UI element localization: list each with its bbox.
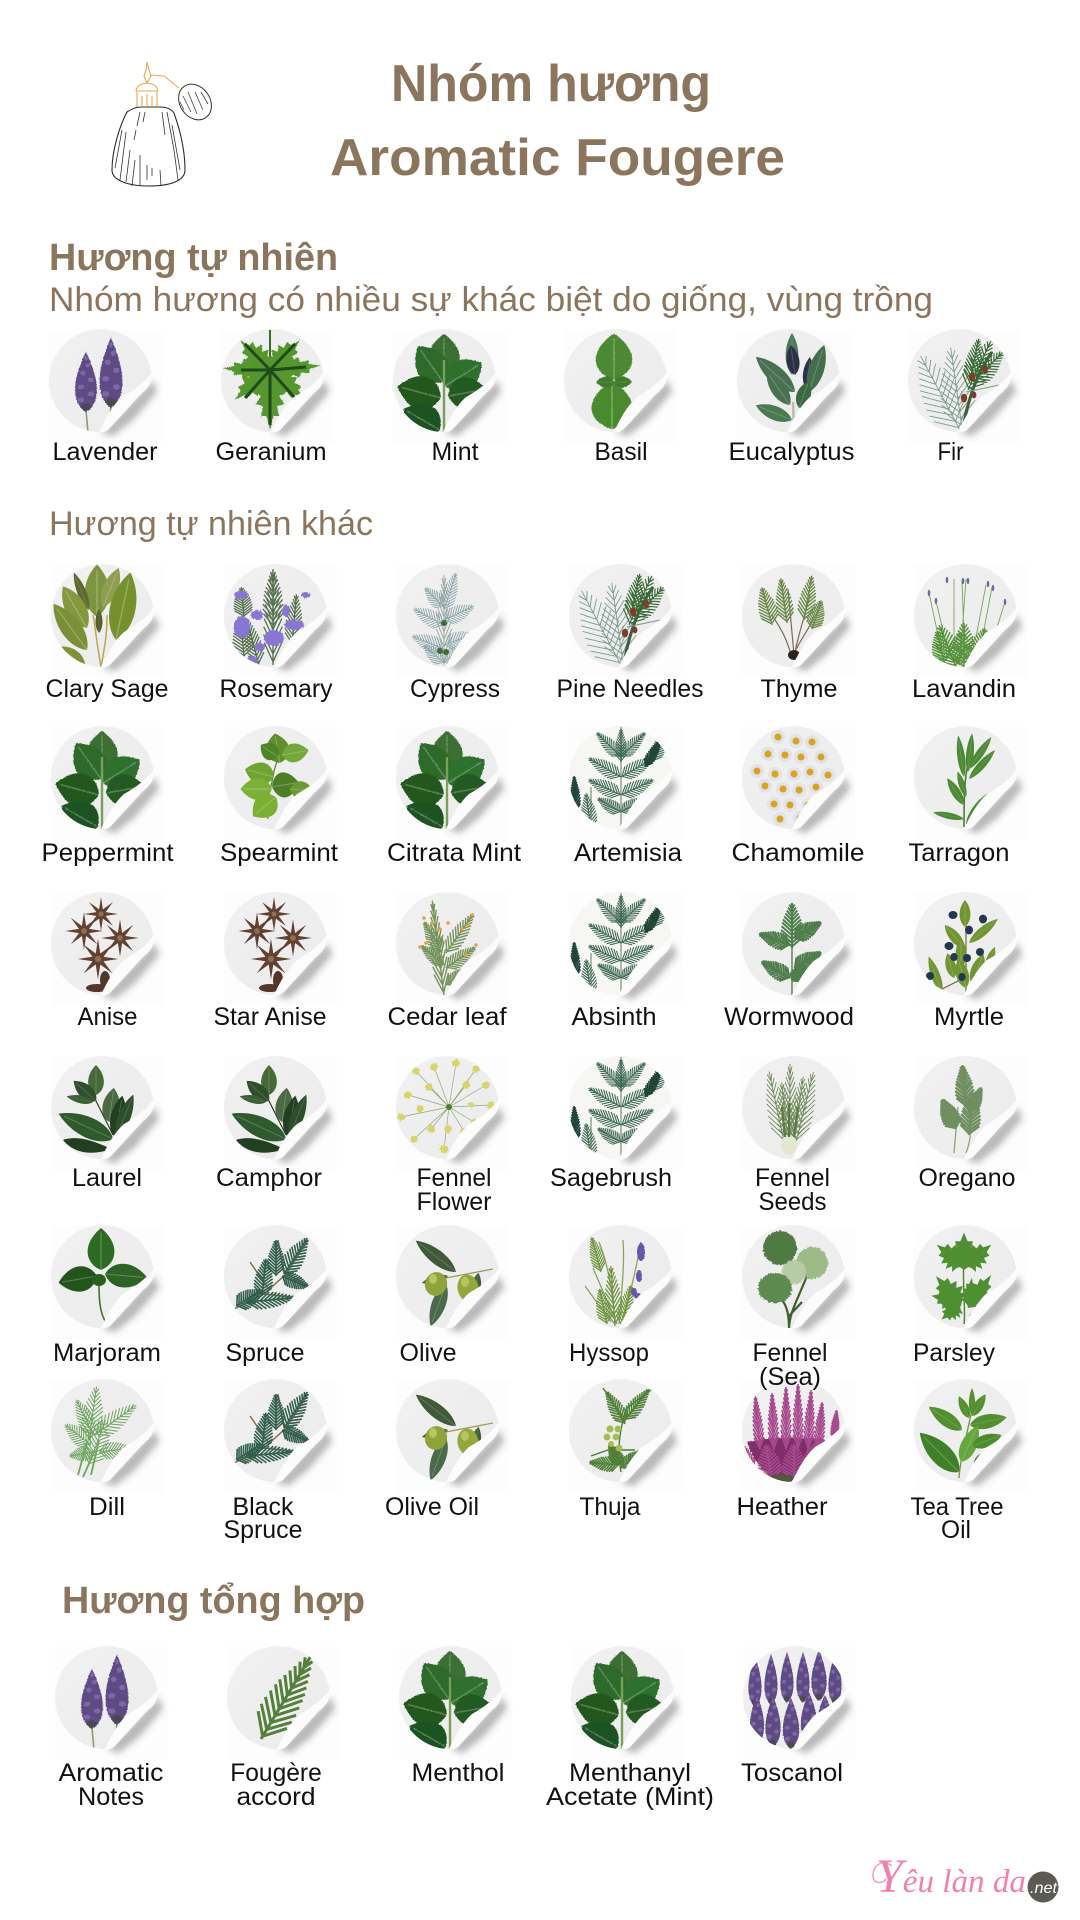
- item: Dill: [51, 1379, 164, 1521]
- item: Lavender: [49, 329, 162, 466]
- title: Nhóm hương: [391, 55, 711, 113]
- item: Lavandin: [912, 564, 1027, 703]
- item: Wormwood: Wormwood: [724, 1003, 854, 1031]
- item: Citrata Mint: [387, 726, 521, 867]
- item: Black Spruce: Black: [232, 1493, 294, 1521]
- subheading: natural scents description: Nhóm hương có nhiều sự khác biệt do giống, vùng trồng: [49, 281, 933, 319]
- item: Thyme: Thyme: [760, 675, 838, 703]
- item: Tarragon: Tarragon: [908, 839, 1010, 867]
- item: Eucalyptus: [728, 329, 854, 466]
- item: Menthanyl Acetate (Mint): Acetate (Mint): [546, 1783, 714, 1811]
- item: Sagebrush: [550, 1056, 682, 1192]
- item: Absinth: Absinth: [572, 1003, 656, 1031]
- item: Fennel Seeds: [742, 1056, 855, 1216]
- item: Marjoram: [51, 1225, 164, 1367]
- item: Anise: Anise: [78, 1003, 138, 1031]
- item: Menthanyl Acetate (Mint): [546, 1646, 714, 1811]
- item: Heather: Heather: [736, 1493, 828, 1521]
- item: Aromatic Notes: [55, 1646, 168, 1811]
- item: Geranium: [216, 329, 334, 466]
- item: Cypress: Cypress: [410, 675, 500, 703]
- heading: synthetic scents: Hương tổng hợp: [62, 1580, 365, 1622]
- item: Fir: [908, 329, 1019, 460]
- item: Absinth: [569, 892, 682, 1031]
- item: Spearmint: [220, 726, 338, 867]
- item: Star Anise: [214, 892, 337, 1031]
- item: Fennel (Sea): Fennel: [752, 1339, 828, 1367]
- logo: Yêu làn da .net: .net: [1030, 1880, 1058, 1897]
- item: Tea Tree Oil: Oil: [941, 1516, 971, 1544]
- item: Camphor: [216, 1056, 337, 1192]
- item: Myrtle: Myrtle: [934, 1003, 1004, 1031]
- item: Dill: Dill: [89, 1493, 125, 1521]
- item: Toscanol: Toscanol: [741, 1759, 843, 1787]
- icon: perfume bottle with atomizer bulb: [112, 62, 218, 186]
- item: Fennel Flower: [396, 1056, 509, 1216]
- item: Anise: [51, 892, 164, 1031]
- item: Menthol: [399, 1646, 512, 1787]
- heading: other natural scents: Hương tự nhiên khác: [49, 505, 373, 543]
- item: Wormwood: [724, 892, 855, 1031]
- title: Aromatic Fougere: [330, 129, 785, 187]
- item: Fougère accord: [227, 1646, 340, 1811]
- item: Laurel: Laurel: [72, 1164, 142, 1192]
- item: Hyssop: [569, 1225, 682, 1367]
- item: Artemisia: Artemisia: [574, 839, 682, 867]
- item: Geranium: Geranium: [216, 438, 326, 466]
- item: Tea Tree Oil: [910, 1379, 1027, 1544]
- item: Sagebrush: Sagebrush: [550, 1164, 672, 1192]
- item: Clary Sage: [45, 564, 169, 703]
- item: Menthanyl Acetate (Mint): Menthanyl: [569, 1759, 691, 1787]
- item: Mint: [393, 329, 506, 466]
- item: Fennel Seeds: Seeds: [758, 1188, 826, 1216]
- item: Oregano: Oregano: [918, 1164, 1016, 1192]
- item: Fennel (Sea): (Sea): [759, 1363, 821, 1391]
- item: Pine Needles: [556, 564, 704, 703]
- item: Laurel: [51, 1056, 164, 1192]
- item: Cedar leaf: Cedar leaf: [388, 1003, 507, 1031]
- item: Lavender: Lavender: [52, 438, 158, 466]
- item: Tarragon: [908, 726, 1027, 867]
- heading: natural scents: Hương tự nhiên: [49, 237, 338, 279]
- item: Hyssop: Hyssop: [569, 1339, 649, 1367]
- item: Rosemary: [220, 564, 337, 703]
- item: Myrtle: [914, 892, 1027, 1031]
- item: Heather: [738, 1379, 853, 1515]
- item: Peppermint: Peppermint: [42, 839, 174, 867]
- item: Fennel Flower: Fennel: [416, 1164, 492, 1192]
- item: Fennel (Sea): [742, 1225, 855, 1391]
- item: Olive Oil: Olive Oil: [385, 1493, 479, 1521]
- item: Fennel Flower: Flower: [416, 1188, 492, 1216]
- item: Lavandin: Lavandin: [912, 675, 1016, 703]
- item: Clary Sage: Clary Sage: [46, 675, 168, 703]
- item: Cypress: [396, 564, 509, 703]
- item: Thyme: [742, 564, 855, 703]
- item: Cedar leaf: [388, 892, 509, 1031]
- item: Parsley: Parsley: [913, 1339, 995, 1367]
- item: Basil: [564, 329, 677, 466]
- item: Thuja: [569, 1379, 682, 1521]
- item: Black Spruce: [224, 1379, 337, 1544]
- item: Black Spruce: Spruce: [224, 1516, 302, 1544]
- item: Artemisia: [569, 726, 682, 867]
- item: Eucalyptus: Eucalyptus: [728, 438, 854, 466]
- item: Toscanol: [741, 1646, 856, 1787]
- item: Star Anise: Star Anise: [214, 1003, 326, 1031]
- item: Chamomile: Chamomile: [732, 839, 864, 867]
- item: Fennel Seeds: Fennel: [755, 1164, 830, 1192]
- item: Olive: [396, 1225, 509, 1367]
- item: Pine Needles: Pine Needles: [556, 675, 704, 703]
- item: Chamomile: [732, 726, 864, 867]
- item: Rosemary: Rosemary: [220, 675, 333, 703]
- item: Peppermint: [42, 726, 174, 867]
- item: Olive: Olive: [400, 1339, 456, 1367]
- item: Camphor: Camphor: [216, 1164, 322, 1192]
- item: Fougère accord: accord: [236, 1783, 316, 1811]
- title: [330, 55, 785, 187]
- item: Fir: Fir: [938, 438, 964, 466]
- item: Citrata Mint: Citrata Mint: [387, 839, 521, 867]
- item: Oregano: [914, 1056, 1027, 1192]
- item: Aromatic Notes: Notes: [78, 1783, 144, 1811]
- item: Mint: Mint: [432, 438, 479, 466]
- item: Spruce: [224, 1225, 337, 1367]
- item: Fougère accord: Fougère: [230, 1759, 322, 1787]
- item: Spruce: Spruce: [226, 1339, 304, 1367]
- item: Spearmint: Spearmint: [220, 839, 338, 867]
- item: Thuja: Thuja: [580, 1493, 641, 1521]
- item: Menthol: Menthol: [412, 1759, 504, 1787]
- logo: Yêu làn da .net: Yêu làn da: [876, 1850, 1026, 1903]
- item: Aromatic Notes: Aromatic: [58, 1759, 164, 1787]
- item: Parsley: [913, 1225, 1027, 1367]
- item: Basil: Basil: [594, 438, 648, 466]
- item: Tea Tree Oil: Tea Tree: [910, 1493, 1004, 1521]
- item: Marjoram: Marjoram: [53, 1339, 161, 1367]
- item: Olive Oil: [385, 1379, 509, 1521]
